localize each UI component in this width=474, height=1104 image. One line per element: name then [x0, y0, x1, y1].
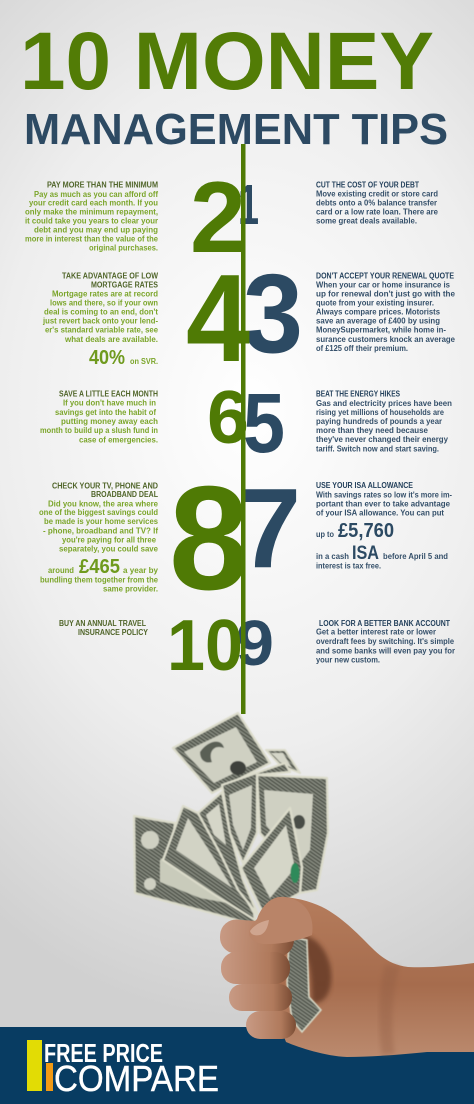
body text: savings get into the habit of — [55, 407, 156, 417]
fanned note: twenty — [163, 806, 255, 920]
body text: rising yet millions of households are — [316, 407, 444, 417]
footer band — [0, 1027, 474, 1104]
body text: card or a low rate loan. There are — [316, 207, 438, 217]
body text: If you don't have much in — [63, 398, 156, 408]
body text: some great deals available. — [316, 216, 417, 226]
body text: your credit card each month. If you — [29, 198, 158, 208]
ring finger — [229, 984, 292, 1011]
navy numerals: 5 — [243, 376, 285, 470]
body text: up to — [316, 529, 334, 539]
front note — [241, 808, 302, 913]
body text: Gas and electricity prices have been — [316, 398, 452, 408]
illustration: hand gripping banknotes — [134, 713, 474, 1057]
body text: it could take you years to clear your — [25, 216, 159, 226]
body text: your new custom. — [316, 654, 380, 664]
tip 10: travel insurance — [59, 618, 148, 637]
body text: original purchases. — [89, 242, 158, 252]
stat: 40 percent: on SVR. — [130, 356, 158, 366]
body text: one of the biggest savings could — [39, 507, 158, 517]
tip 6: save a little each month — [40, 389, 158, 444]
stat: 5,760 pounds: £5,760 — [338, 520, 394, 542]
body text — [316, 489, 452, 571]
green numerals: 8 — [169, 456, 249, 621]
navy numerals: 7 — [239, 465, 301, 591]
heading — [52, 480, 158, 499]
thumb — [249, 897, 313, 944]
body text: - phone, broadband and TV? If — [43, 525, 158, 535]
body text — [25, 189, 159, 252]
body text — [39, 498, 158, 594]
little finger — [246, 1011, 296, 1039]
heading — [62, 270, 159, 289]
navy numerals: 3 — [243, 251, 303, 376]
body text: up for renewal don't just go with the — [316, 288, 455, 298]
body text: overdraft fees by switching. It's simple — [316, 636, 454, 646]
body text: you're paying for all three — [62, 534, 156, 544]
body text: around — [48, 565, 74, 575]
right note — [257, 775, 328, 893]
banknote strip in palm — [287, 937, 321, 1032]
heading: MORTGAGE RATES — [91, 279, 158, 289]
wrist crease shading — [379, 965, 400, 1055]
green numerals: 10 — [167, 606, 243, 686]
body text: more than they need because — [316, 425, 428, 435]
body text: case of emergencies. — [79, 434, 158, 444]
tip 3: renewal quote — [316, 270, 455, 353]
body text: deal is coming to an end, don't — [44, 307, 158, 317]
body text: before April 5 and — [383, 551, 448, 561]
tip 1: cut the cost of your debt — [316, 179, 438, 226]
body text: just revert back onto your lend- — [42, 316, 158, 326]
stat: 465 pounds: £465 — [79, 556, 120, 578]
navy numerals: 9 — [236, 607, 274, 679]
body text: save an average of £400 by using — [316, 316, 440, 326]
tip 7: ISA allowance — [316, 480, 452, 571]
body text: and some banks will even pay you for — [316, 645, 456, 655]
green numerals: 6 — [207, 375, 249, 459]
body text: be made is your home services — [44, 516, 158, 526]
tip 9: better bank account — [316, 618, 456, 664]
stat: 40 percent: 40% — [89, 347, 125, 369]
body text: paying hundreds of pounds a year — [316, 416, 443, 426]
fanned note: middle — [198, 792, 258, 915]
body text: Get a better interest rate or lower — [316, 627, 437, 637]
tip 4: low mortgage rates — [42, 270, 159, 369]
central vertical line — [241, 144, 246, 714]
body text: quote from your existing insurer. — [316, 298, 434, 308]
tip 10: travel insurance: BUY AN ANNUAL TRAVEL — [59, 618, 146, 628]
body text — [316, 398, 452, 453]
heading: CHECK YOUR TV, PHONE AND — [52, 480, 158, 490]
hand and arm — [257, 897, 474, 1057]
body text: they've never changed their energy — [316, 434, 448, 444]
body text: month to build up a slush fund in — [40, 425, 158, 435]
heading: SAVE A LITTLE EACH MONTH — [59, 389, 158, 399]
logo yellow bar — [27, 1040, 42, 1091]
body text: er's standard variable rate, see — [45, 325, 158, 335]
back note — [266, 750, 300, 773]
body text — [316, 280, 455, 353]
body text: same provider. — [103, 584, 158, 594]
body text: debt and you may end up paying — [34, 224, 158, 234]
logo: Free Price Compare — [27, 1038, 219, 1099]
body text: more in interest than the value of the — [25, 233, 158, 243]
fanned note: upper — [222, 763, 290, 863]
heading: USE YOUR ISA ALLOWANCE — [316, 480, 413, 490]
body text: debts onto a 0% balance transfer — [316, 198, 438, 208]
heading: BEAT THE ENERGY HIKES — [316, 389, 400, 399]
stat: ISA: ISA — [352, 543, 379, 564]
body text: portant than ever to take advantage — [316, 498, 450, 508]
body text: of your ISA allowance. You can put — [316, 507, 444, 517]
body text: of £125 off their premium. — [316, 343, 408, 353]
index finger — [219, 918, 295, 958]
green numerals: 4 — [186, 250, 250, 388]
green numerals: 2 — [190, 162, 246, 274]
title: Management Tips: MANAGEMENT TIPS — [24, 105, 448, 154]
title: 10 Money: 10 MONEY — [20, 16, 434, 107]
heading: PAY MORE THAN THE MINIMUM — [47, 179, 158, 189]
body text: in a cash — [316, 551, 349, 561]
body text: putting money away each — [61, 416, 158, 426]
body text: bundling them together from the — [40, 575, 158, 585]
body text: surance customers knock an average — [316, 334, 455, 344]
body text: what deals are available. — [64, 334, 158, 344]
banknotes fan — [134, 713, 328, 925]
hand shadow under thumb — [300, 935, 331, 1003]
body text — [42, 289, 158, 344]
body text: Did you know, the area where — [48, 498, 158, 508]
body text: separately, you could save — [59, 543, 158, 553]
logo word: Compare: COMPARE — [54, 1058, 219, 1099]
middle finger — [221, 952, 290, 984]
left note — [134, 816, 255, 925]
heading: CUT THE COST OF YOUR DEBT — [316, 179, 420, 189]
body text: Mortgage rates are at record — [52, 289, 158, 299]
body text — [40, 398, 158, 444]
heading: TAKE ADVANTAGE OF LOW — [62, 270, 159, 280]
tip 10: travel insurance: INSURANCE POLICY — [78, 627, 148, 637]
top note — [173, 713, 270, 793]
thumbnail — [250, 920, 269, 935]
stat: 40 percent — [89, 347, 158, 369]
body text: Pay as much as you can afford off — [34, 189, 158, 199]
green numerals — [167, 162, 250, 686]
body text — [316, 627, 456, 664]
body text: only make the minimum repayment, — [25, 207, 158, 217]
body text: When your car or home insurance is — [316, 280, 450, 290]
body text: a year by — [123, 565, 158, 575]
body text: lows and there, so if your own — [50, 298, 158, 308]
tip 5: energy hikes — [316, 389, 452, 453]
body text: Always compare prices. Motorists — [316, 307, 440, 317]
body text: interest is tax free. — [316, 561, 381, 571]
logo word: Free Price: FREE PRICE — [44, 1038, 163, 1068]
heading: BROADBAND DEAL — [91, 489, 158, 499]
body text — [316, 188, 438, 226]
body text: Move existing credit or store card — [316, 188, 438, 198]
logo orange bar — [46, 1063, 53, 1091]
body text: With savings rates so low it's more im- — [316, 489, 452, 499]
tip 2: pay more than the minimum — [25, 179, 159, 252]
body text: MoneySupermarket, while home in- — [316, 325, 446, 335]
navy numerals — [236, 173, 303, 679]
tip 8: tv, phone and broadband — [39, 480, 158, 594]
body text: tariff. Switch now and start saving. — [316, 443, 439, 453]
navy numerals: 1 — [238, 173, 259, 237]
